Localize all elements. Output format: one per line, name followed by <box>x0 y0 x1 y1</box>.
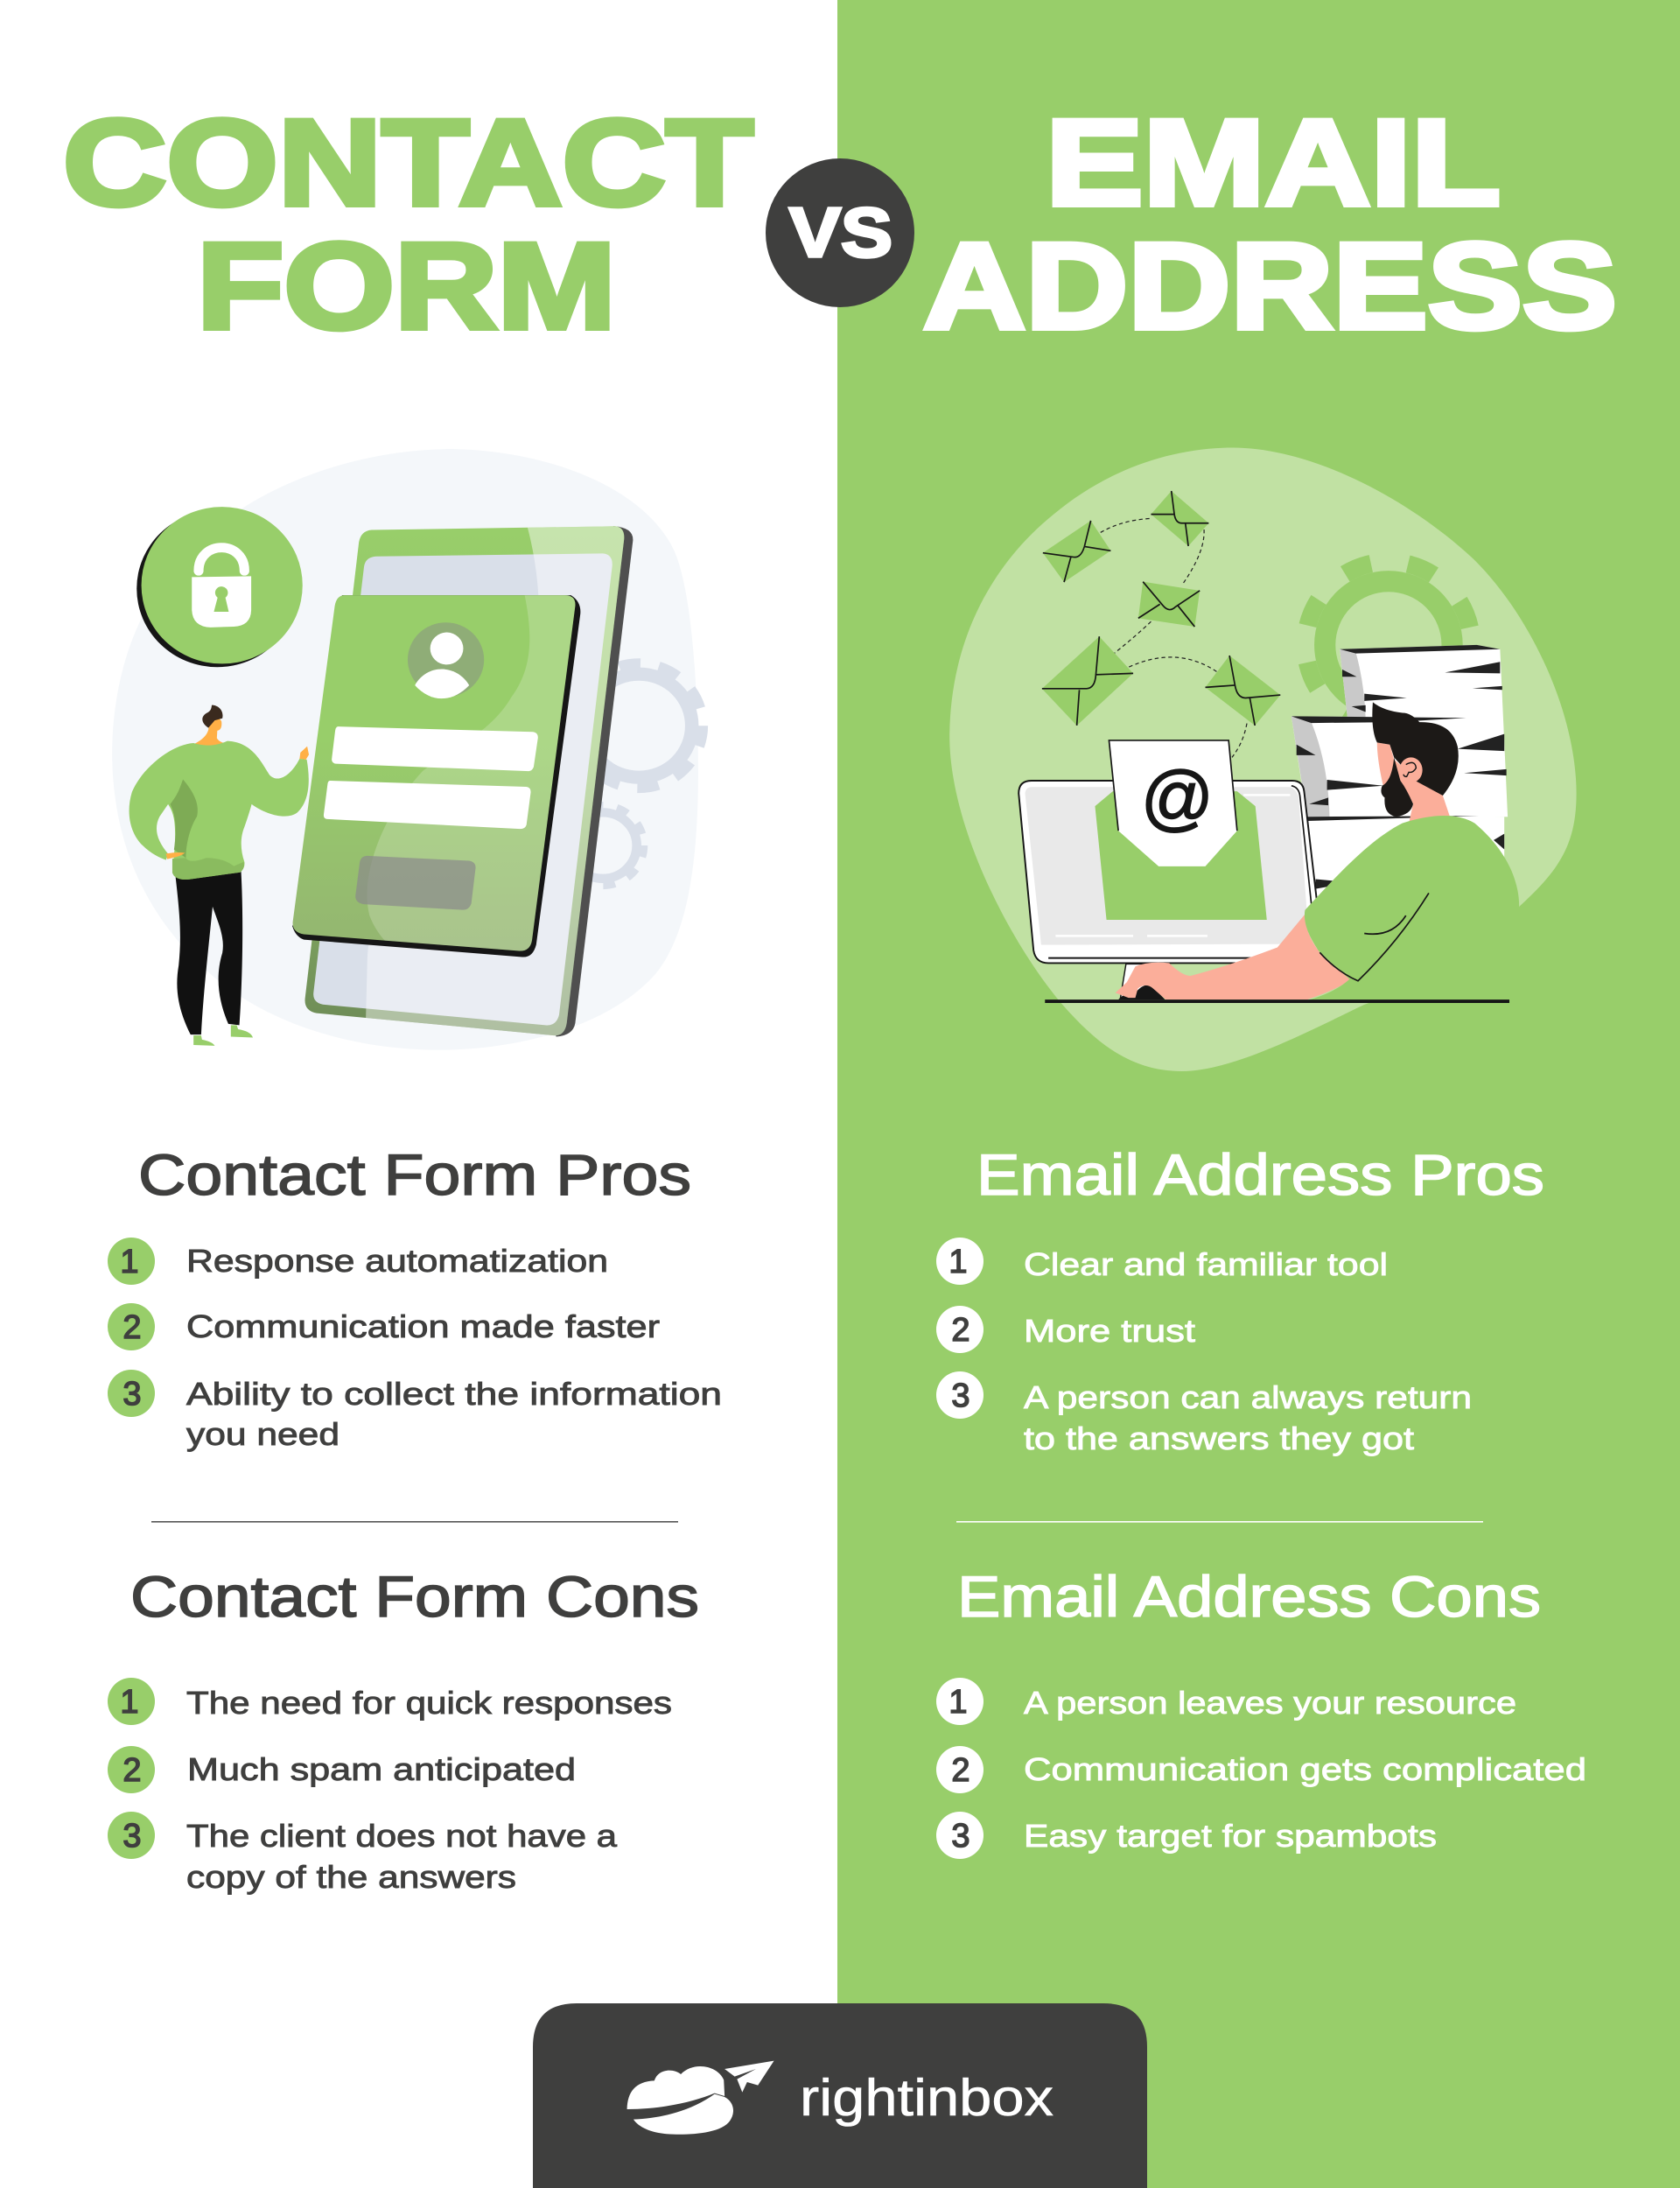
list: cons: Communication gets complicated <box>1024 1751 1586 1787</box>
list: pros: 2 <box>122 1309 142 1346</box>
heading: email address pros: Email Address Pros <box>976 1142 1544 1207</box>
illustration: contact form on phone <box>112 449 702 1050</box>
figure: bearded man at desk <box>1045 702 1519 1001</box>
list: pros: A person can always return <box>1024 1379 1472 1415</box>
panel: contact form cons <box>108 1564 699 1895</box>
icon: cloud and paper plane <box>627 2061 774 2135</box>
list: cons <box>108 1678 672 1895</box>
title: contact form <box>63 94 753 354</box>
divider <box>151 1521 678 1523</box>
list: cons: 2 <box>122 1752 142 1789</box>
list: cons <box>936 1678 1586 1859</box>
list: pros: to the answers they got <box>1024 1420 1414 1456</box>
list: pros: 3 <box>122 1376 142 1413</box>
panel: email address cons <box>936 1564 1586 1859</box>
list: cons: copy of the answers <box>186 1859 516 1895</box>
icon: monitor <box>1018 781 1324 998</box>
title: email address: ADDRESS <box>923 217 1617 354</box>
icon: avatar <box>408 622 484 698</box>
title: email address: EMAIL <box>1046 94 1501 231</box>
list: pros: More trust <box>1024 1313 1195 1349</box>
list: pros: 2 <box>951 1312 970 1349</box>
title: email address <box>923 94 1617 354</box>
title: contact form: FORM <box>197 217 616 354</box>
title: contact form: CONTACT <box>63 94 753 231</box>
list: pros: you need <box>186 1416 340 1452</box>
icon: open envelope with at sign: @ <box>1141 756 1214 838</box>
list: pros <box>936 1238 1472 1456</box>
illustration: email at computer <box>949 448 1577 1071</box>
list: cons: 1 <box>120 1684 139 1721</box>
badge: vs <box>766 158 914 307</box>
footer: rightinbox logo bar <box>533 2003 1147 2188</box>
list: cons: Much spam anticipated <box>187 1751 576 1787</box>
list: cons: 1 <box>948 1684 968 1721</box>
panel: contact form pros <box>108 1142 722 1452</box>
paper stacks <box>1292 645 1508 904</box>
list: cons: 3 <box>951 1818 970 1855</box>
icon: open envelope with at sign <box>1095 740 1267 920</box>
list: cons: The client does not have a <box>186 1818 618 1854</box>
divider <box>956 1521 1483 1523</box>
form card <box>292 593 584 957</box>
panel: email address pros <box>936 1142 1544 1456</box>
figure: man pointing <box>130 705 309 1046</box>
panel: right green background <box>837 0 1680 2188</box>
list: pros: 1 <box>948 1244 968 1280</box>
heading: contact form pros: Contact Form Pros <box>138 1142 691 1207</box>
list: cons: The need for quick responses <box>186 1685 672 1721</box>
badge: vs: VS <box>789 193 892 271</box>
list: cons: Easy target for spambots <box>1024 1818 1437 1854</box>
logo wordmark: rightinbox <box>800 2069 1054 2127</box>
list: pros <box>108 1238 722 1452</box>
heading: email address cons: Email Address Cons <box>957 1564 1541 1629</box>
form field one <box>332 726 538 771</box>
list: pros: 1 <box>120 1244 139 1280</box>
heading: contact form cons: Contact Form Cons <box>130 1564 699 1629</box>
panel: left white background <box>0 0 837 2188</box>
icon: gears <box>563 664 702 885</box>
phone <box>305 523 639 1040</box>
list: pros: 3 <box>951 1378 970 1414</box>
list: pros: Communication made faster <box>186 1308 660 1344</box>
list: pros: Clear and familiar tool <box>1024 1246 1388 1282</box>
list: pros: Response automatization <box>186 1243 608 1279</box>
list: pros: Ability to collect the information <box>186 1376 722 1412</box>
icon: padlock badge <box>136 507 303 667</box>
form field two <box>324 781 531 829</box>
icon: gear <box>1274 530 1503 760</box>
list: cons: 2 <box>951 1752 970 1789</box>
form button <box>355 856 476 910</box>
list: cons: 3 <box>122 1818 142 1855</box>
icon: flying envelopes <box>1042 491 1280 757</box>
list: cons: A person leaves your resource <box>1024 1685 1516 1721</box>
